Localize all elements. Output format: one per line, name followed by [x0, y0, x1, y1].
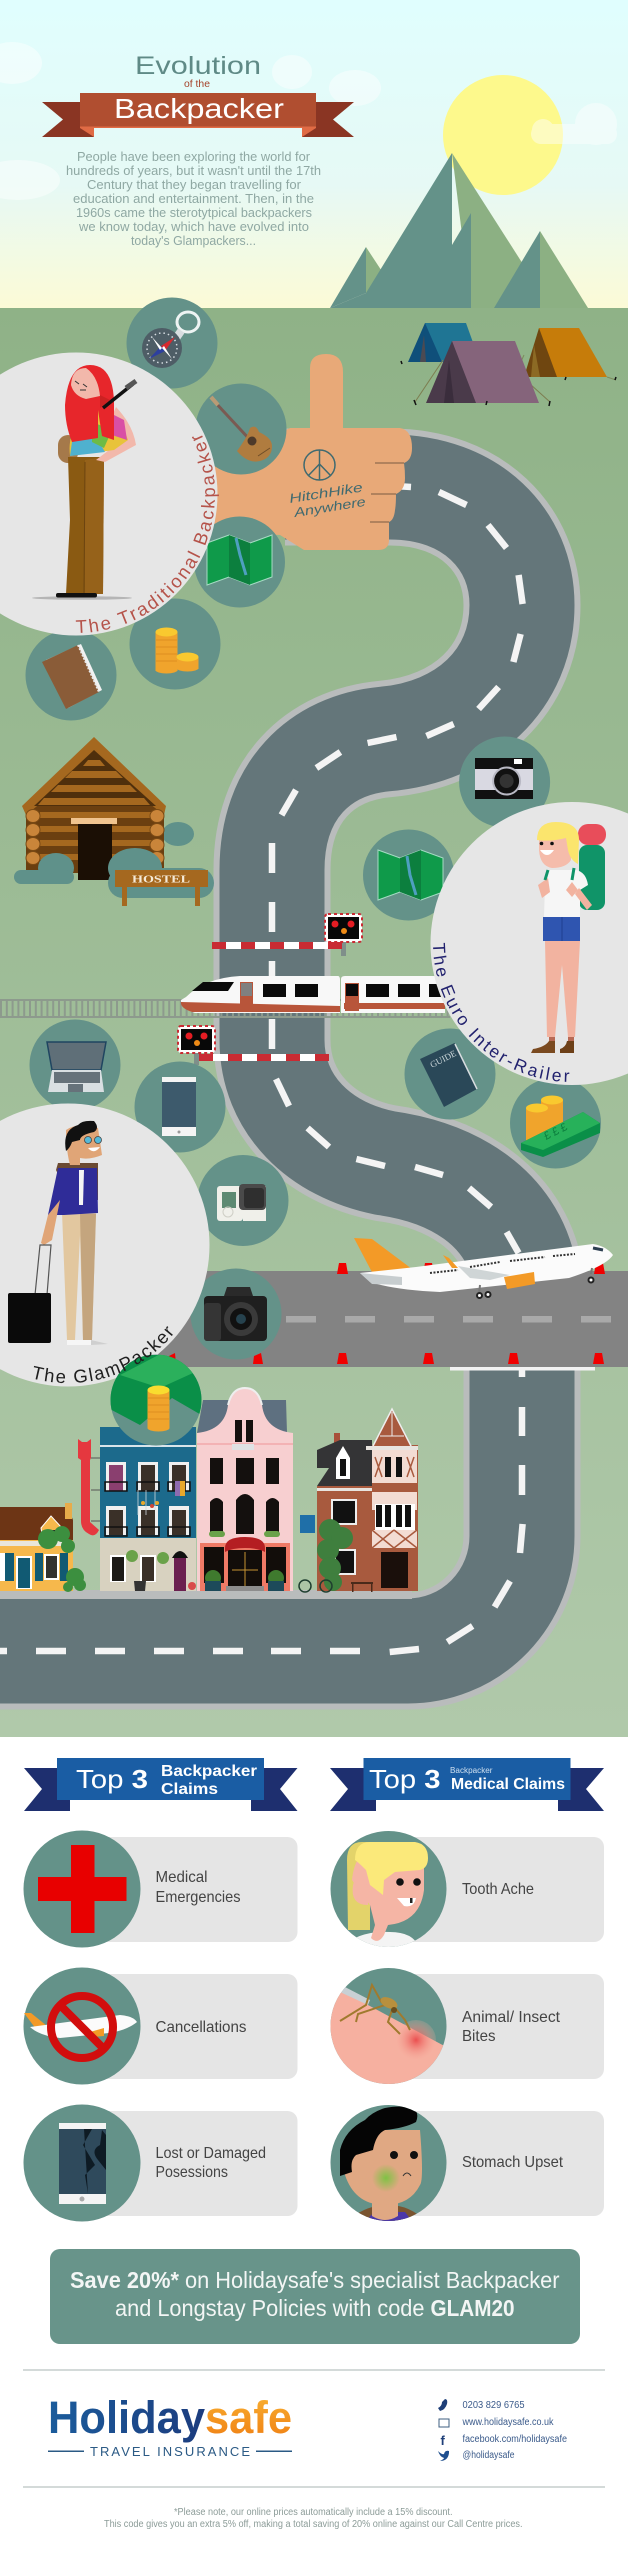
intro paragraph: Century that they began travelling for [87, 178, 301, 192]
icon circle: smartphone [134, 1062, 226, 1152]
panel: right claims header [330, 1758, 604, 1811]
orange tent [519, 328, 616, 380]
icon: twitter [438, 2451, 449, 2461]
road: upper section [272, 486, 525, 1275]
contact text: www.holidaysafe.co.uk [462, 2417, 554, 2428]
pink building [197, 1388, 293, 1591]
icon circle: action camera [198, 1155, 288, 1246]
icon circle: coins and notes [510, 1078, 601, 1168]
brick building [299, 1409, 418, 1592]
airbnb banner [78, 1439, 100, 1535]
icon circle: coins [130, 598, 220, 690]
airbnb sign [300, 1515, 315, 1533]
title [42, 52, 354, 137]
icon circle: journal [26, 630, 116, 720]
icon circle: guitar [196, 384, 286, 474]
ribbon [24, 1758, 298, 1811]
promo line 2: GLAM20 [430, 2295, 514, 2321]
claim text: Emergencies [156, 1889, 240, 1906]
panel: traditional backpacker [0, 352, 219, 636]
icon circle: guide book: GUIDE [428, 1048, 458, 1070]
hand text: Anywhere [292, 494, 367, 520]
hand text [288, 480, 367, 520]
claim text: Medical [156, 1869, 208, 1886]
icon circle: camera [459, 736, 550, 828]
train [181, 976, 445, 1013]
logo: holidaysafe: Holiday [48, 2392, 205, 2443]
claim text: Animal/ Insect [462, 2009, 561, 2026]
background: sky [0, 0, 628, 309]
icon circle: green money [110, 1354, 202, 1446]
intro paragraph: People have been exploring the world for [77, 150, 310, 164]
claim text [462, 2009, 561, 2045]
aeroplane [354, 1238, 613, 1298]
claim text: Lost or Damaged [156, 2145, 266, 2162]
panel: euro inter-railer [430, 802, 628, 1085]
logo: holidaysafe [48, 2392, 292, 2459]
footnote [104, 2507, 522, 2530]
road: lower section [0, 1367, 523, 1652]
suitcase [8, 1245, 51, 1343]
panel: left claims header [24, 1758, 298, 1811]
promo line 2: and Longstay Policies with code [115, 2295, 424, 2321]
promo panel [50, 2249, 580, 2344]
logo: holidaysafe: safe [205, 2392, 292, 2443]
intro paragraph: today's Glampackers... [131, 234, 256, 248]
claim text [156, 1869, 240, 1906]
claim text: Tooth Ache [462, 1881, 534, 1898]
icon: blond face [347, 1842, 428, 1947]
hostel cabin [22, 737, 166, 880]
claim text: Cancellations [156, 2019, 246, 2036]
title: of the: of the [184, 79, 210, 90]
buildings [0, 1388, 418, 1592]
yellow house [0, 1503, 86, 1592]
ground [0, 308, 628, 1737]
icon circle: coins and notes: £ £ £ [542, 1121, 569, 1143]
footnote: *Please note, our online prices automatically include a 15% discount. [174, 2507, 452, 2518]
contact text: 0203 829 6765 [462, 2400, 525, 2411]
train car 2 [341, 976, 445, 1013]
claim text [156, 2145, 266, 2181]
icon: facebook: f [440, 2433, 446, 2448]
icon circle: SLR camera [190, 1268, 282, 1360]
icon: red cross [38, 1845, 126, 1933]
contact text: @holidaysafe [462, 2450, 515, 2461]
promo line 1: Save 20%* [70, 2267, 179, 2293]
railway track [0, 1000, 450, 1017]
blue tent [408, 323, 480, 362]
icon circle: guide book [404, 1028, 496, 1120]
bushes in front of hostel [14, 848, 214, 898]
header text: backpacker claims: Claims [161, 1781, 218, 1798]
header text: backpacker claims [161, 1763, 257, 1798]
divider line [23, 2486, 605, 2488]
label: the euro inter-railer: The Euro Inter-Railer [433, 942, 570, 1082]
icon circle: compass [126, 298, 218, 388]
hostel sign [115, 870, 208, 906]
claim text: Posessions [156, 2164, 228, 2181]
intro paragraph: education and entertainment. Then, in the [73, 192, 314, 206]
header text: top 3: Top 3 [76, 1764, 148, 1794]
icon: sick face [340, 2106, 425, 2221]
purple tent [401, 341, 616, 406]
level crossing: upper barrier [212, 914, 362, 956]
contact text [462, 2400, 567, 2461]
hostel sign: HOSTEL [132, 874, 190, 886]
title: Evolution: Evolution [135, 52, 261, 80]
contact details [438, 2399, 567, 2461]
claim: animal insect bites [330, 1968, 604, 2090]
character: glampacker [8, 1121, 108, 1345]
icon: broken phone [59, 2123, 106, 2204]
divider line [23, 2370, 605, 2371]
footnote: This code gives you an extra 5% off, making a total saving of 20% online against our Call Centre prices. [104, 2519, 522, 2530]
character: hippie [32, 365, 136, 600]
icon circle: map 2 [363, 830, 454, 920]
icon: mosquito on skin [330, 1985, 450, 2090]
contact text: facebook.com/holidaysafe [462, 2434, 567, 2445]
claim: stomach upset [330, 2105, 604, 2221]
runway [60, 1263, 628, 1370]
label: the glampacker: The GlamPacker [34, 1326, 173, 1384]
train car 1 [181, 976, 340, 1013]
mountains [330, 153, 588, 308]
claim text: Stomach Upset [462, 2154, 564, 2171]
level crossing: lower barrier [178, 1026, 329, 1065]
peace sign [304, 450, 335, 480]
hand: hitchhike thumb [200, 354, 412, 550]
header text: backpacker claims: Backpacker [161, 1763, 257, 1780]
title ribbon: Backpacker [114, 93, 284, 124]
bushes behind hostel [162, 822, 194, 846]
logo: holidaysafe: TRAVEL INSURANCE [90, 2444, 250, 2459]
icon: cancelled plane [24, 1996, 137, 2058]
blue building [100, 1427, 196, 1591]
header text: medical claims: Medical Claims [451, 1776, 565, 1793]
header text: top 3: Top 3 [369, 1764, 440, 1794]
icon: phone [438, 2399, 447, 2411]
label: the traditional backpacker: The Traditional Backpacker [76, 436, 219, 633]
claim text: Bites [462, 2028, 496, 2045]
character: inter-railer [531, 822, 606, 1053]
ribbon [330, 1758, 604, 1811]
title ribbon [42, 93, 354, 137]
intro paragraph: we know today, which have evolved into [78, 220, 309, 234]
icon circle: laptop [30, 1020, 120, 1110]
tents [401, 323, 616, 406]
promo line 1: on Holidaysafe's specialist Backpacker [185, 2267, 560, 2293]
hostel [14, 737, 214, 906]
intro paragraph: hundreds of years, but it wasn't until the 17th [66, 164, 321, 178]
hand text: HitchHike [288, 480, 364, 506]
sun [443, 75, 563, 195]
icon: monitor [439, 2419, 449, 2427]
panel: glampacker [0, 1104, 210, 1386]
claim: tooth ache [330, 1831, 604, 1947]
claim: cancellations [24, 1968, 298, 2084]
clouds [0, 42, 617, 200]
intro paragraph: 1960s came the sterotytpical backpackers [76, 206, 312, 220]
claim: medical emergencies [24, 1830, 298, 1948]
claim: lost or damaged possessions [24, 2104, 298, 2222]
intro paragraph [66, 150, 321, 248]
icon circle: map [194, 516, 285, 608]
header text: backpacker: Backpacker [450, 1766, 493, 1775]
